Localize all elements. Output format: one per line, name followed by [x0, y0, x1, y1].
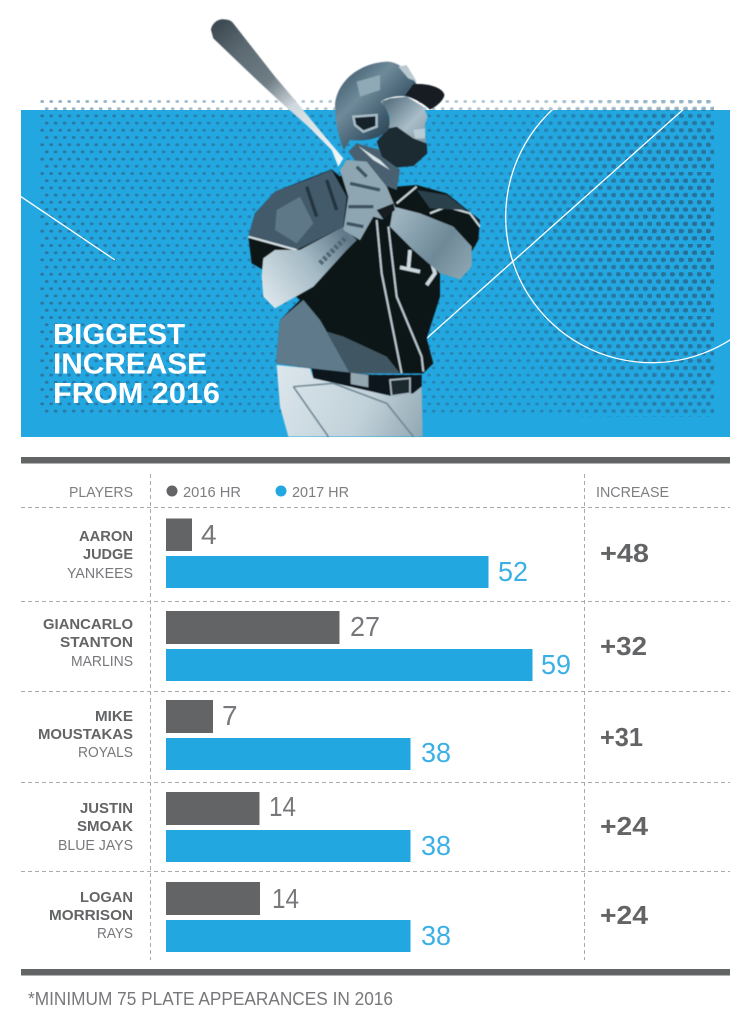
legend: 2016 HR: 2016 HR: [183, 484, 241, 501]
increase value: +31: [600, 722, 643, 752]
increase value: +24: [600, 811, 649, 841]
increase value: +24: [600, 900, 649, 930]
player name: [67, 528, 133, 582]
player name: BLUE JAYS: [58, 837, 133, 854]
player name: [38, 708, 133, 761]
player name: [49, 889, 133, 942]
belt buckle: [390, 378, 410, 396]
pants: [277, 365, 423, 437]
jersey body: [248, 160, 480, 373]
table top rule: [21, 457, 730, 464]
increase column heading: INCREASE: [596, 484, 669, 501]
footnote: *MINIMUM 75 PLATE APPEARANCES IN 2016: [28, 989, 393, 1009]
player name: [43, 616, 133, 670]
jersey lettering: [400, 250, 435, 285]
player name: ROYALS: [78, 744, 133, 761]
player name: STANTON: [60, 634, 133, 651]
jersey lower side: [276, 300, 350, 373]
table bottom rule: [21, 969, 730, 976]
headline: [53, 319, 220, 410]
player name: RAYS: [97, 925, 133, 942]
player name: YANKEES: [67, 565, 133, 582]
player photo illustration: [211, 19, 480, 437]
player name: JUDGE: [83, 546, 133, 563]
row: Mike Moustakas: [38, 700, 643, 770]
face: [377, 97, 428, 167]
row: Justin Smoak: [58, 791, 649, 862]
legend: 2017 HR: 2017 HR: [292, 484, 349, 501]
headline: BIGGEST: [53, 319, 186, 351]
right arm: [390, 207, 472, 279]
player name: LOGAN: [80, 889, 133, 906]
row: Giancarlo Stanton: [43, 611, 647, 681]
jersey piping: [377, 220, 423, 373]
increase value: +48: [600, 538, 649, 568]
headline: FROM 2016: [53, 378, 220, 410]
blue background: [21, 110, 730, 437]
bars: 4: [201, 519, 217, 550]
bars: 14: [269, 791, 296, 822]
player name: MOUSTAKAS: [38, 726, 133, 743]
player name: MORRISON: [49, 907, 133, 924]
jersey shoulder: [248, 170, 347, 250]
left arm: [262, 227, 357, 308]
player name: GIANCARLO: [43, 616, 133, 633]
helmet: [335, 62, 444, 150]
bars: 7: [222, 700, 238, 731]
bars: 38: [421, 920, 451, 951]
player name: MIKE: [95, 708, 133, 725]
bars: [166, 518, 528, 588]
players column heading: PLAYERS: [69, 484, 133, 501]
player name: AARON: [79, 528, 133, 545]
helmet logo: [398, 65, 417, 82]
bars: [166, 700, 451, 770]
field lines: [21, 110, 730, 364]
headline: INCREASE: [53, 348, 207, 380]
bars: 38: [421, 830, 451, 861]
beard: [377, 127, 427, 167]
row: Logan Morrison: [49, 882, 649, 952]
hero panel: [20, 19, 748, 437]
bars: 38: [421, 737, 451, 768]
bat: [211, 19, 343, 167]
gloved hands: [340, 160, 395, 240]
table grid lines: [21, 474, 730, 960]
bars: 52: [498, 556, 528, 587]
player name: JUSTIN: [80, 800, 133, 817]
row: Aaron Judge: [67, 518, 649, 588]
increase value: +32: [600, 631, 647, 661]
halftone dot texture: [40, 98, 714, 417]
player name: MARLINS: [71, 653, 133, 670]
bars: [166, 611, 571, 681]
bars: [166, 882, 451, 952]
bars: 14: [272, 883, 299, 914]
player name: SMOAK: [77, 818, 133, 835]
bars: 59: [541, 649, 571, 680]
belt: [312, 368, 422, 397]
bars: [166, 791, 451, 862]
bars: 27: [350, 611, 380, 642]
player name: [58, 800, 133, 854]
neck: [348, 143, 400, 190]
table header: [69, 484, 669, 501]
